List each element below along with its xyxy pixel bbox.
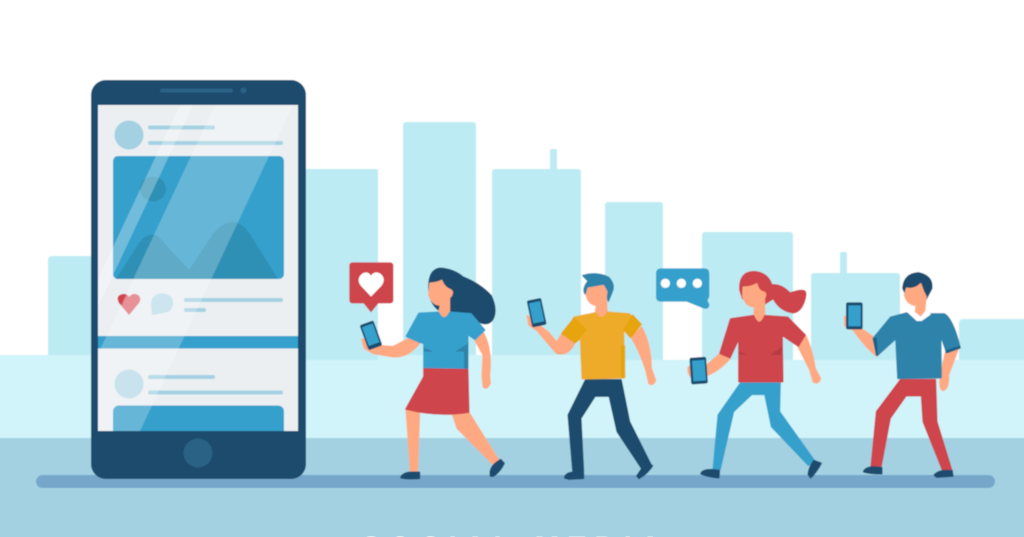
face — [905, 284, 926, 316]
legs — [406, 410, 498, 471]
post 2 image — [112, 404, 285, 432]
figures, woman with heart and man in yellow — [349, 262, 655, 479]
phone body — [91, 80, 306, 479]
face — [586, 286, 607, 317]
divider band — [98, 336, 298, 348]
figures, woman in red and man in teal — [656, 268, 961, 478]
left arm — [688, 354, 730, 378]
hair — [740, 272, 806, 313]
ground — [0, 438, 1024, 537]
left arm — [527, 316, 574, 354]
post 1 text lines — [148, 126, 283, 145]
city skyline — [48, 122, 1024, 368]
phone — [689, 357, 708, 385]
post 2 text lines — [148, 375, 283, 394]
hair — [583, 274, 613, 301]
face — [429, 281, 452, 317]
shoes — [864, 467, 953, 477]
left arm — [362, 338, 420, 357]
shoes — [565, 464, 652, 479]
left arm — [845, 316, 877, 356]
phone speaker — [160, 88, 233, 92]
shirt — [406, 312, 485, 369]
phone camera — [240, 88, 246, 94]
phone — [846, 302, 863, 329]
road bar — [36, 475, 995, 488]
post 1 caption lines — [184, 298, 283, 312]
man in teal sweater — [845, 273, 961, 477]
skirt — [406, 369, 469, 414]
shoes — [701, 461, 821, 478]
comment bubble — [151, 294, 173, 315]
home button — [184, 438, 212, 468]
reaction heart — [118, 294, 140, 315]
face — [743, 284, 766, 322]
right arm — [475, 333, 490, 388]
shoes — [401, 460, 504, 479]
chat bubble — [656, 268, 709, 309]
right arm — [798, 336, 820, 383]
lower pale band — [0, 355, 1024, 440]
hair — [429, 268, 495, 323]
collar — [907, 309, 931, 321]
phone — [91, 80, 306, 479]
phone screen — [98, 105, 298, 446]
sleeves — [562, 315, 641, 378]
screen glare — [100, 125, 276, 432]
phone — [527, 298, 547, 328]
hair — [903, 273, 932, 301]
shirt — [567, 312, 638, 379]
shirt — [720, 316, 805, 382]
sweater — [873, 313, 960, 378]
right arm — [940, 348, 958, 390]
post 2 avatar — [114, 370, 144, 398]
man in yellow shirt — [527, 274, 655, 479]
right arm — [632, 327, 655, 384]
post 1 image — [113, 156, 284, 279]
trousers — [568, 380, 651, 471]
woman in blue shirt — [360, 268, 504, 479]
phone — [360, 320, 382, 350]
trousers — [713, 383, 815, 469]
post 1 avatar — [114, 120, 144, 150]
like badge — [349, 262, 393, 312]
trousers — [871, 380, 951, 469]
woman in red shirt — [688, 272, 821, 478]
